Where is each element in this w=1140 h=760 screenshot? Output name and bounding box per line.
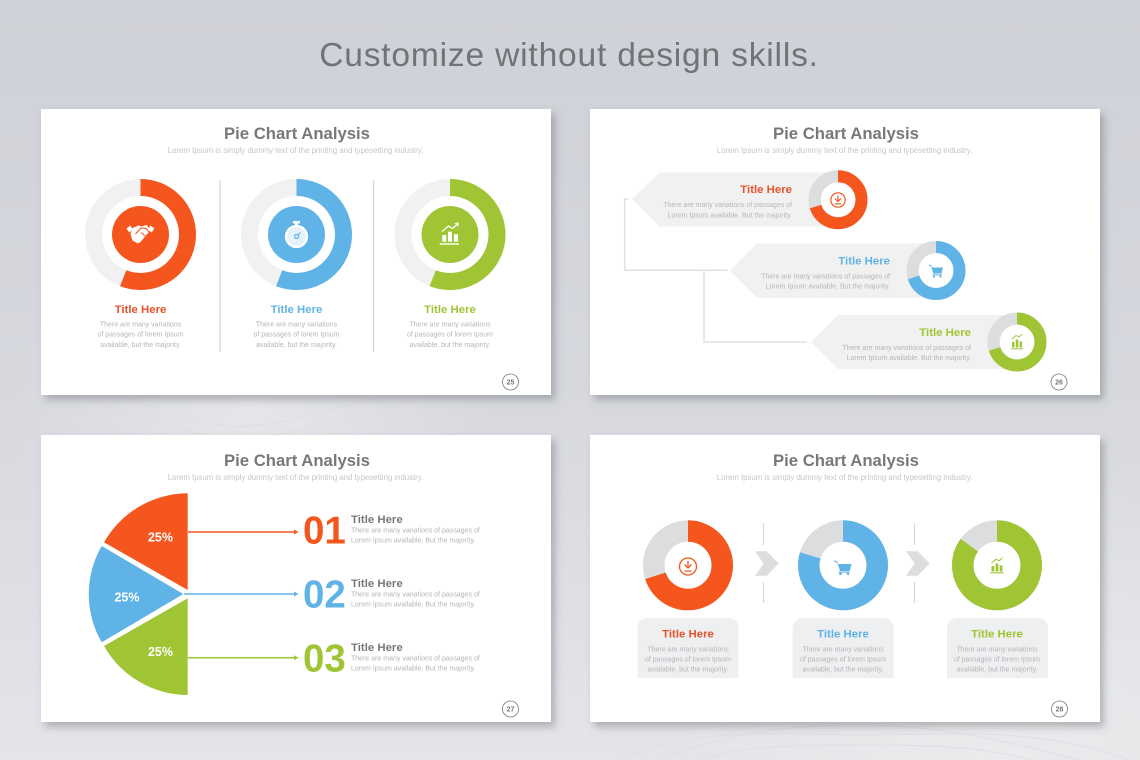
list item 02: There are many variations of passages of (351, 592, 480, 598)
card: blue: available, but the majority. (803, 667, 883, 674)
list item 01: Lorem Ipsum available, But the majority. (351, 538, 475, 545)
column text: green (407, 304, 493, 349)
pie chart: 25% (114, 590, 140, 604)
column text: orange: There are many variations (100, 322, 182, 328)
arrow: green (188, 655, 298, 660)
pie chart (89, 493, 188, 695)
page number: 26 (1055, 380, 1063, 386)
arrow row: orange: Lorem Ipsum available. But the majority. (668, 212, 792, 219)
donut: orange with handshake (94, 188, 188, 282)
icon: growth chart (990, 558, 1004, 573)
card: blue: Title Here (817, 628, 869, 640)
arrow row: orange (632, 172, 862, 226)
card: green: There are many variations (956, 646, 1038, 654)
card: blue (793, 618, 894, 678)
heading: Pie Chart Analysis (224, 451, 370, 470)
donut: orange (654, 531, 722, 600)
arrow row: green (811, 315, 1040, 369)
list item 02: Title Here (351, 578, 403, 590)
page number: 25 (507, 380, 514, 386)
panel: slide 26 arrow flow (590, 109, 1100, 395)
column text: orange: available, but the majority. (100, 342, 181, 349)
arrow row: blue: Lorem Ipsum available, But the majority. (766, 284, 890, 291)
chevron arrow 2 (906, 523, 930, 603)
page number (1052, 701, 1068, 717)
chevron arrow 1 (755, 523, 779, 603)
arrow row: blue: Title Here (838, 256, 890, 268)
arrow row: orange: There are many variations of passages of (663, 202, 792, 209)
donut: green (963, 531, 1031, 600)
page number (502, 701, 518, 717)
page number (1051, 374, 1067, 390)
icon: handshake (126, 225, 154, 243)
arrow row: green: Title Here (919, 327, 971, 339)
column text: green: Title Here (424, 304, 476, 316)
arrow row: orange: Title Here (740, 184, 792, 196)
list item 03: Lorem Ipsum available, But the majority. (351, 666, 475, 673)
icon: cart (834, 560, 852, 575)
icon: stopwatch (286, 221, 307, 247)
list item 02 (303, 574, 480, 616)
column text: orange: of passages of lorem Ipsum (98, 332, 184, 339)
arrow: blue (184, 592, 298, 596)
subheading: Lorem Ipsum is simply dummy text of the printing and typesetting industry. (717, 146, 972, 155)
list item 01: There are many variations of passages of (351, 528, 480, 534)
pie chart: 25% (148, 645, 173, 659)
list item 01 (303, 510, 480, 552)
icon: growth chart (1011, 334, 1023, 349)
arrow row: green: Lorem Ipsum available. But the majority. (847, 355, 971, 362)
card: blue: of passages of lorem Ipsum (800, 656, 886, 664)
column text: blue: Title Here (271, 304, 322, 316)
card: green: Title Here (971, 628, 1023, 640)
list item 03: There are many variations of passages of (351, 656, 480, 662)
subheading: Lorem Ipsum is simply dummy text of the printing and typesetting industry. (168, 146, 423, 155)
card: green: available, but the majority. (957, 667, 1037, 674)
arrow: orange (188, 530, 298, 534)
arrow row: blue (730, 244, 960, 298)
list item 01: 01 (303, 510, 346, 552)
icon: download (680, 558, 696, 575)
arrow row: blue: There are many variations of passages of (761, 274, 890, 280)
page number: 27 (507, 706, 514, 714)
card: blue: There are many variations (802, 646, 884, 654)
list item 03 (303, 638, 480, 680)
column text: green: There are many variations (409, 322, 491, 328)
donut: blue (809, 531, 877, 600)
pie chart: 25% (148, 530, 173, 544)
card: orange: Title Here (662, 628, 714, 640)
page number: 28 (1056, 706, 1063, 714)
divider lines (220, 180, 374, 352)
list item 03: 03 (303, 638, 346, 680)
column text: blue: available, but the majority. (256, 342, 337, 349)
card: green (947, 618, 1048, 678)
panel: slide 25 three donuts (41, 109, 551, 395)
column text: blue: There are many variations (256, 322, 338, 328)
connector lines (625, 199, 807, 342)
column text: green: available, but the majority. (410, 342, 490, 349)
column text: orange: Title Here (115, 304, 166, 316)
page number (502, 374, 518, 390)
icon: download (831, 193, 845, 207)
column text: blue: of passages of lorem Ipsum (254, 332, 340, 339)
column text: blue (254, 304, 340, 349)
icon: growth chart (440, 222, 459, 245)
subheading: Lorem Ipsum is simply dummy text of the printing and typesetting industry. (717, 473, 972, 482)
card: orange: available, but the majority. (648, 667, 728, 674)
heading: Pie Chart Analysis (773, 124, 919, 143)
column text: green: of passages of lorem Ipsum (407, 332, 493, 339)
list item 02: 02 (303, 574, 346, 616)
donut: green with chart (403, 188, 497, 282)
card: orange: There are many variations (647, 646, 729, 654)
title: Customize without design skills. (319, 37, 819, 74)
panel: slide 28 donut process (590, 435, 1100, 722)
card: green: of passages of lorem Ipsum (954, 656, 1040, 664)
card: orange: of passages of lorem Ipsum (645, 656, 731, 664)
icon: cart (929, 264, 943, 278)
list item 01: Title Here (351, 514, 403, 526)
arrow row: green: There are many variations of passages of (842, 345, 971, 352)
donut: blue with stopwatch (250, 188, 344, 282)
column text: orange (98, 304, 184, 349)
list item 03: Title Here (351, 642, 403, 654)
panel: slide 27 pie with numbered list (41, 435, 551, 722)
subheading: Lorem Ipsum is simply dummy text of the printing and typesetting industry. (168, 473, 423, 482)
heading: Pie Chart Analysis (224, 124, 370, 143)
card: orange (638, 618, 738, 678)
heading: Pie Chart Analysis (773, 451, 919, 470)
list item 02: Lorem Ipsum available, But the majority. (351, 602, 475, 609)
